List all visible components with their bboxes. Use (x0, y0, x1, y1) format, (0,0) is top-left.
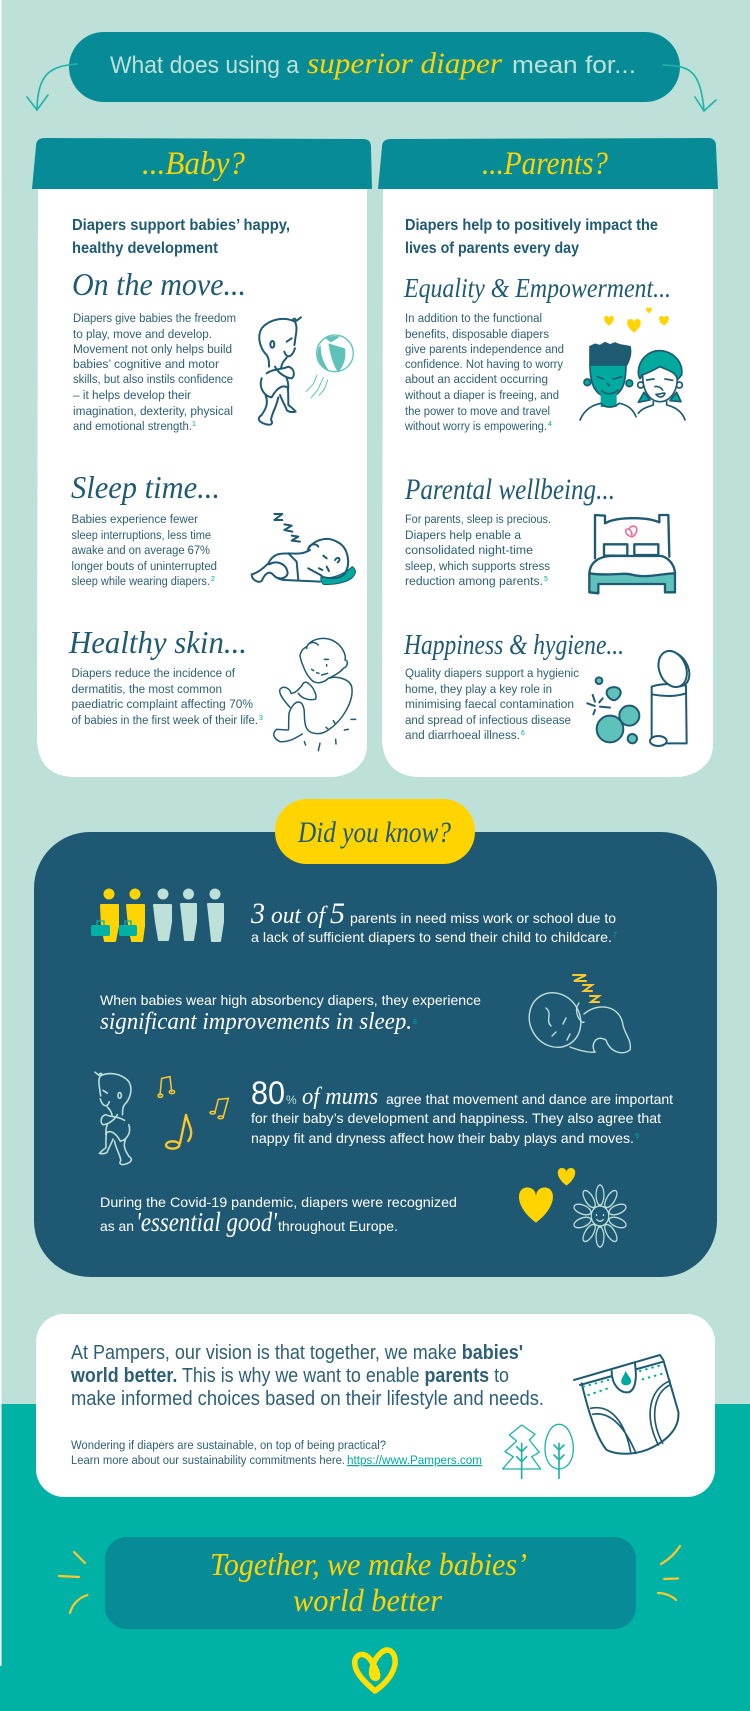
subheading: parents: Diapers help to positively impact the (405, 217, 658, 234)
stat: 3 out of 5: out of (271, 903, 328, 929)
panel header: baby: ...Baby? (142, 146, 245, 182)
icon: flower (573, 1185, 627, 1247)
text: healthy skin: of babies in the first week of their life. (72, 713, 258, 727)
fact: sleep improvements: 8 (413, 1019, 417, 1026)
closing banner (105, 1537, 636, 1629)
badge: did you know (275, 799, 475, 864)
text: on the move: babies’ cognitive and motor (73, 357, 219, 371)
text: happiness and hygiene: 6 (521, 730, 525, 737)
text: on the move (73, 311, 236, 433)
heading: equality and empowerment: Equality & Empowerment... (403, 273, 671, 303)
icon: bin with bubbles (587, 647, 692, 746)
subheading: baby: healthy development (72, 240, 218, 257)
background: teal footer band (0, 1404, 750, 1711)
icon: sleeping baby (252, 514, 355, 584)
text: parental wellbeing: sleep, which supports stress (405, 559, 550, 573)
text: equality and empowerment: give parents independence and (405, 342, 564, 356)
text: sustainability note (71, 1438, 482, 1467)
text: on the move: imagination, dexterity, physical (73, 404, 233, 418)
text: healthy skin (72, 666, 263, 727)
text: vision statement: make informed choices based on their lifestyle and needs. (71, 1388, 544, 1410)
text: sustainability note: https://www.Pampers.com (347, 1453, 482, 1467)
text: sleep time: sleep interruptions, less time (72, 528, 211, 542)
text: on the move: – it helps develop their (73, 388, 191, 402)
text: equality and empowerment: confidence. Not having to worry (405, 357, 564, 371)
heading: healthy skin: Healthy skin... (68, 624, 247, 660)
icon: trees (503, 1424, 573, 1478)
text: on the move: and emotional strength. (73, 419, 192, 433)
text: on the move: Diapers give babies the freedom (73, 311, 236, 325)
text: on the move: to play, move and develop. (73, 327, 212, 341)
icon: sparks right (658, 1546, 680, 1600)
text: happiness and hygiene: and spread of infectious disease (405, 713, 571, 727)
stat: 80 percent of mums (251, 1075, 673, 1146)
panel: parents (378, 138, 718, 777)
subheading: baby: Diapers support babies’ happy, (72, 217, 290, 234)
text: parental wellbeing (405, 512, 551, 588)
icon: curled baby (274, 638, 356, 751)
icon: beach ball (306, 335, 353, 398)
stat: 80 percent of mums: nappy fit and dryness affect how their baby plays and moves. (251, 1130, 634, 1146)
stat: 3 out of 5: a lack of sufficient diapers to send their child to childcare. (251, 929, 612, 945)
icon: baby walking outline (95, 1072, 131, 1165)
panel: baby (32, 138, 372, 777)
icon: sleeping baby outline (519, 975, 630, 1057)
fact: essential good: as an (100, 1218, 134, 1234)
text: healthy skin: paediatric complaint affecting 70% (72, 697, 253, 711)
text: sleep time: longer bouts of uninterrupted (72, 559, 217, 573)
stat: 3 out of 5: 7 (613, 932, 617, 939)
fact: sleep improvements: significant improvements in sleep. (100, 1009, 412, 1035)
text: vision statement: At Pampers, our vision is that together, we make babies' (71, 1342, 523, 1364)
arrow: title to baby (27, 64, 77, 110)
text: healthy skin: Diapers reduce the incidence of (72, 666, 236, 680)
fact: essential good: During the Covid-19 pandemic, diapers were recognized (100, 1194, 457, 1210)
text: happiness and hygiene: and diarrhoeal illness. (405, 728, 520, 742)
subheading: parents (405, 217, 658, 257)
text: on the move: Movement not only helps build (73, 342, 232, 356)
text: healthy skin: dermatitis, the most common (72, 682, 222, 696)
text: on the move: skills, but also instils confidence (73, 372, 233, 386)
fact: essential good (100, 1194, 457, 1237)
text: parental wellbeing: Diapers help enable a (405, 528, 521, 542)
closing banner: world better (293, 1582, 443, 1618)
text: happiness and hygiene: minimising faecal contamination (405, 697, 574, 711)
stat: 80 percent of mums: of mums (302, 1084, 378, 1110)
stat: 3 out of 5: 3 (250, 897, 265, 930)
panel header: baby (32, 138, 372, 189)
text: equality and empowerment: without worry is empowering. (404, 419, 547, 433)
logo: Pampers heart (355, 1650, 395, 1691)
heading: happiness and hygiene: Happiness & hygiene... (403, 629, 624, 661)
heading: on the move: On the move... (72, 266, 246, 302)
text: healthy skin: 3 (259, 715, 263, 722)
text: sleep time: awake and on average 67% (72, 543, 210, 557)
stat: 3 out of 5: 5 (330, 897, 345, 930)
text: happiness and hygiene: home, they play a key role in (405, 682, 552, 696)
text: happiness and hygiene: Quality diapers support a hygienic (405, 666, 579, 680)
text: on the move: 1 (192, 421, 196, 428)
fact: sleep improvements (100, 992, 481, 1035)
panel: vision statement (36, 1314, 715, 1497)
text: equality and empowerment: the power to move and travel (405, 404, 550, 418)
text: vision statement: world better. This is why we want to enable parents to (70, 1365, 509, 1387)
title banner: superior diaper (307, 47, 502, 80)
panel: did you know (34, 799, 717, 1277)
icon: baby walking (259, 317, 301, 425)
badge: did you know: Did you know? (297, 816, 451, 849)
heading: sleep time: Sleep time... (71, 469, 220, 505)
fact: essential good: throughout Europe. (278, 1218, 398, 1234)
title banner (69, 32, 680, 102)
text: sleep time: sleep while wearing diapers. (72, 574, 210, 588)
subheading: baby (72, 217, 290, 257)
stat: 80 percent of mums: 80 (251, 1075, 285, 1111)
text: vision statement (70, 1342, 544, 1410)
closing banner: Together, we make babies’ (210, 1546, 527, 1582)
text: sustainability note: Learn more about our sustainability commitments here. (71, 1453, 345, 1467)
fact: sleep improvements: When babies wear high absorbency diapers, they experience (100, 992, 481, 1008)
text: equality and empowerment: without a diaper is freeing, and (404, 388, 559, 402)
text: happiness and hygiene (405, 666, 579, 742)
stat: 3 out of 5 (250, 897, 617, 945)
stat: 80 percent of mums: agree that movement and dance are important (386, 1091, 673, 1107)
text: equality and empowerment: 4 (548, 421, 552, 428)
icon: hearts above couple (604, 308, 669, 333)
text: parental wellbeing: 5 (544, 576, 548, 583)
text: parental wellbeing: consolidated night-time (405, 543, 533, 557)
icon: music notes (158, 1077, 228, 1149)
arrow: title to parents (663, 65, 716, 111)
icon: yellow hearts (519, 1168, 575, 1223)
stat: 80 percent of mums: 9 (635, 1133, 639, 1140)
text: sustainability note: Wondering if diapers are sustainable, on top of being practical? (71, 1438, 386, 1452)
text: sleep time (72, 512, 217, 588)
heading: parental wellbeing: Parental wellbeing... (404, 473, 615, 506)
text: equality and empowerment (404, 311, 564, 433)
icon: couple (580, 343, 685, 420)
title banner: What does using a (110, 52, 300, 79)
text: parental wellbeing: For parents, sleep is precious. (405, 512, 551, 526)
panel header: parents (378, 138, 718, 189)
text: parental wellbeing: reduction among parents. (405, 574, 543, 588)
subheading: parents: lives of parents every day (405, 240, 579, 257)
panel header: parents: ...Parents? (482, 146, 608, 182)
stat: 80 percent of mums: % (286, 1093, 297, 1107)
text: sleep time: Babies experience fewer (72, 512, 198, 526)
icon: five parents, three highlighted (91, 890, 223, 941)
icon: diaper (574, 1355, 678, 1454)
title banner: mean for... (512, 52, 636, 79)
stat: 3 out of 5: parents in need miss work or school due to (350, 910, 616, 926)
text: equality and empowerment: about an accident occurring (405, 372, 548, 386)
icon: bed (589, 515, 675, 593)
text: sleep time: 2 (211, 576, 215, 583)
icon: sparks left (59, 1552, 88, 1613)
stat: 80 percent of mums: for their baby’s development and happiness. They also agree that (251, 1110, 661, 1126)
fact: essential good: 'essential good' (136, 1207, 278, 1237)
text: equality and empowerment: benefits, disposable diapers (405, 327, 549, 341)
text: equality and empowerment: In addition to the functional (405, 311, 542, 325)
